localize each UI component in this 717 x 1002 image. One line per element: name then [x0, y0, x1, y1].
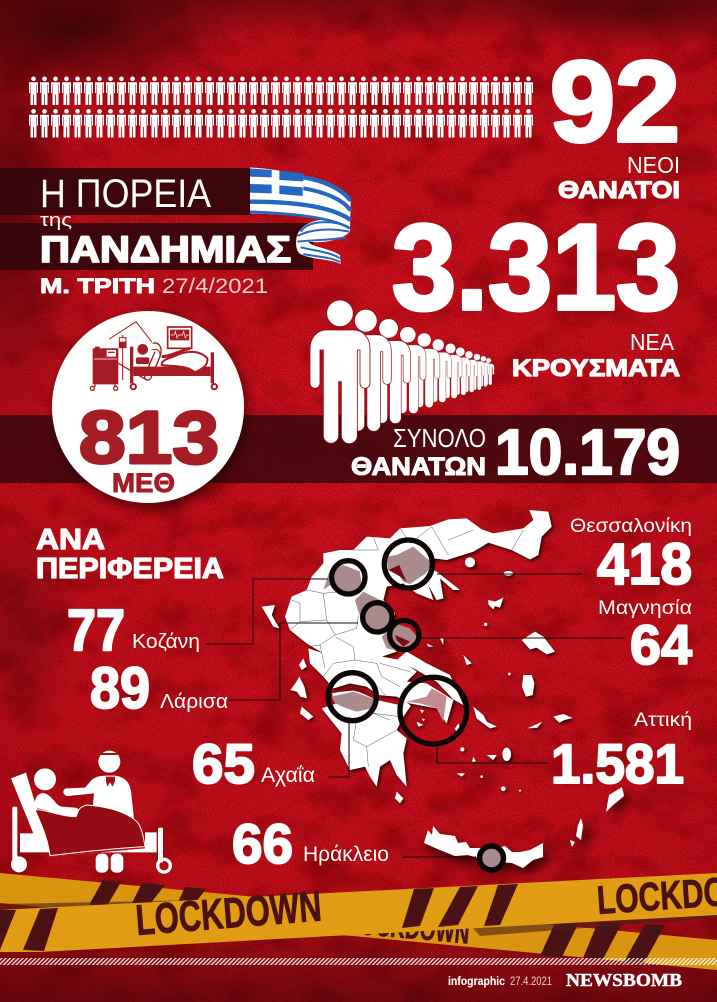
land masses: [262, 510, 573, 803]
lockdown tape: LOCKDOWN: [134, 883, 323, 945]
ICU circle: ΜΕΘ: [112, 468, 175, 498]
region labels left: Κοζάνη: [132, 631, 200, 653]
stat: total deaths 10.179: [351, 416, 680, 488]
region labels left: [67, 598, 389, 875]
region labels right: Μαγνησία: [598, 598, 692, 619]
region labels right: 64: [630, 613, 692, 676]
region labels left: 89: [90, 656, 150, 721]
region labels left: Λάρισα: [160, 691, 228, 713]
icon: Greek flag ribbon: [250, 167, 351, 264]
title block: Η ΠΟΡΕΙΑ: [40, 172, 211, 216]
region labels right: 418: [597, 532, 692, 597]
stat: 92 new deaths: ΝΕΟΙ: [627, 152, 680, 178]
region labels left: Ηράκλειο: [303, 843, 389, 866]
heading: by region: [36, 524, 224, 585]
region labels right: 1.581: [551, 732, 684, 795]
title block: της: [40, 210, 72, 230]
heading: by region: ΠΕΡΙΦΕΡΕΙΑ: [36, 553, 224, 585]
ICU circle: 813: [79, 396, 219, 479]
ICU circle: [52, 311, 244, 503]
stat: 3.313 new cases: ΝΕΑ: [630, 329, 675, 355]
icon: nurse and patient: [11, 751, 170, 873]
heading: by region: ΑΝΑ: [36, 524, 105, 556]
region labels left: 77: [67, 598, 125, 663]
stat: 3.313 new cases: ΚΡΟΥΣΜΑΤΑ: [512, 355, 680, 382]
region labels left: Αχαΐα: [261, 764, 315, 787]
region labels right: [551, 516, 692, 795]
highlighted regions: [323, 547, 447, 722]
footer credit: NEWSBOMB: [566, 970, 682, 990]
footer credit: infographic: [448, 974, 505, 988]
title block: [0, 168, 313, 298]
front tape: [0, 873, 717, 952]
title block: Μ. ΤΡΙΤΗ: [40, 275, 155, 298]
title block: ΠΑΝΔΗΜΙΑΣ: [40, 229, 291, 270]
region labels left: 66: [232, 812, 293, 875]
icon: queue of people: [310, 300, 494, 444]
pictogram: 92 people rows: [29, 76, 535, 138]
gulfs inside circles: [332, 565, 410, 697]
region labels left: 65: [192, 732, 255, 795]
stat: total deaths 10.179: ΣΥΝΟΛΟ: [393, 423, 486, 453]
footer credit: [448, 970, 682, 990]
lockdown tape: [0, 870, 717, 970]
lockdown tape: LOCKDOWN: [346, 905, 471, 951]
dark band: total deaths: [0, 415, 717, 483]
map of Greece: [262, 510, 573, 803]
region borders: [290, 527, 523, 767]
Crete: [424, 787, 624, 870]
stat: 3.313 new cases: 3.313: [392, 199, 680, 335]
stat: 92 new deaths: ΘΑΝΑΤΟΙ: [558, 177, 680, 204]
icon: ICU bed: [90, 322, 217, 390]
region labels right: Θεσσαλονίκη: [570, 516, 692, 537]
leader lines: [205, 574, 625, 857]
stat: 92 new deaths: 92: [550, 39, 680, 166]
title block: 27/4/2021: [162, 275, 268, 298]
highlight circles: [328, 540, 467, 744]
back tape: [0, 873, 717, 970]
stat: total deaths 10.179: 10.179: [495, 416, 680, 488]
region labels right: Αττική: [634, 710, 692, 731]
footer credit: 27.4.2021: [510, 974, 552, 988]
stat: total deaths 10.179: ΘΑΝΑΤΩΝ: [351, 453, 486, 481]
